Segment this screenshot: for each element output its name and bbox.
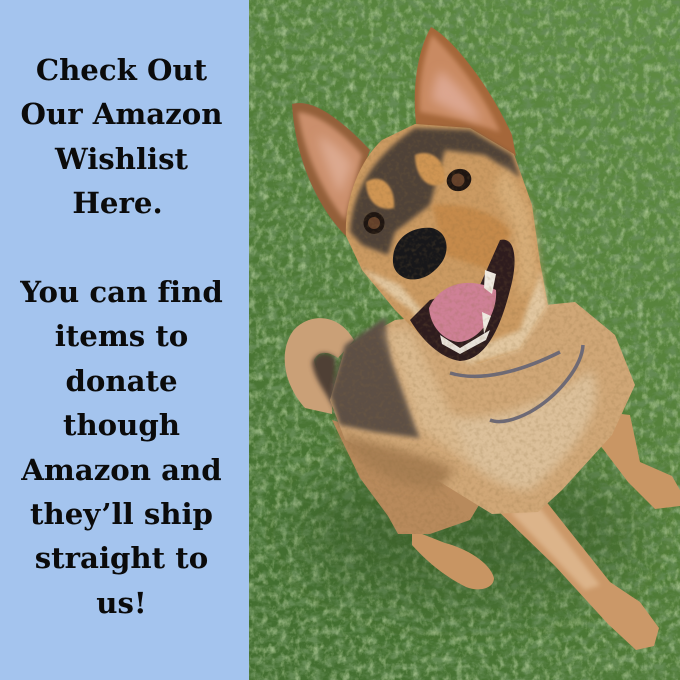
text block: donation explanation: us! bbox=[96, 586, 147, 620]
text block: donation explanation: donate bbox=[65, 364, 178, 398]
dog left ear bbox=[292, 103, 370, 236]
dog right ear bbox=[415, 27, 516, 156]
dog left front leg bbox=[600, 412, 680, 509]
text block: donation explanation: Amazon and bbox=[21, 453, 222, 487]
heading: wishlist text: Wishlist bbox=[55, 142, 188, 176]
dog right front leg bbox=[495, 500, 659, 650]
text block: donation explanation: they’ll ship bbox=[30, 497, 213, 531]
heading: wishlist text bbox=[21, 53, 222, 220]
photo: smiling dog on grass bbox=[249, 0, 680, 680]
grass background bbox=[249, 0, 680, 680]
dog eyes bbox=[364, 165, 475, 234]
heading: wishlist text: Check Out bbox=[36, 53, 207, 87]
dog collar bbox=[450, 345, 583, 422]
dog nose bbox=[393, 228, 447, 279]
heading: wishlist text: Our Amazon bbox=[21, 97, 222, 131]
dog mouth and tongue bbox=[410, 240, 515, 361]
panel: blue text column bbox=[0, 0, 249, 680]
dog tail bbox=[285, 318, 354, 414]
dog rear leg bbox=[332, 420, 482, 534]
dog head bbox=[346, 124, 548, 364]
text block: donation explanation: items to bbox=[55, 319, 188, 353]
fur texture bbox=[336, 126, 632, 534]
text block: donation explanation: You can find bbox=[20, 275, 223, 309]
dog rear foot bbox=[412, 530, 494, 589]
text block: donation explanation: though bbox=[63, 408, 180, 442]
text block: donation explanation bbox=[20, 275, 223, 620]
dog body bbox=[330, 302, 635, 514]
heading: wishlist text: Here. bbox=[72, 186, 163, 220]
text block: donation explanation: straight to bbox=[35, 541, 208, 575]
